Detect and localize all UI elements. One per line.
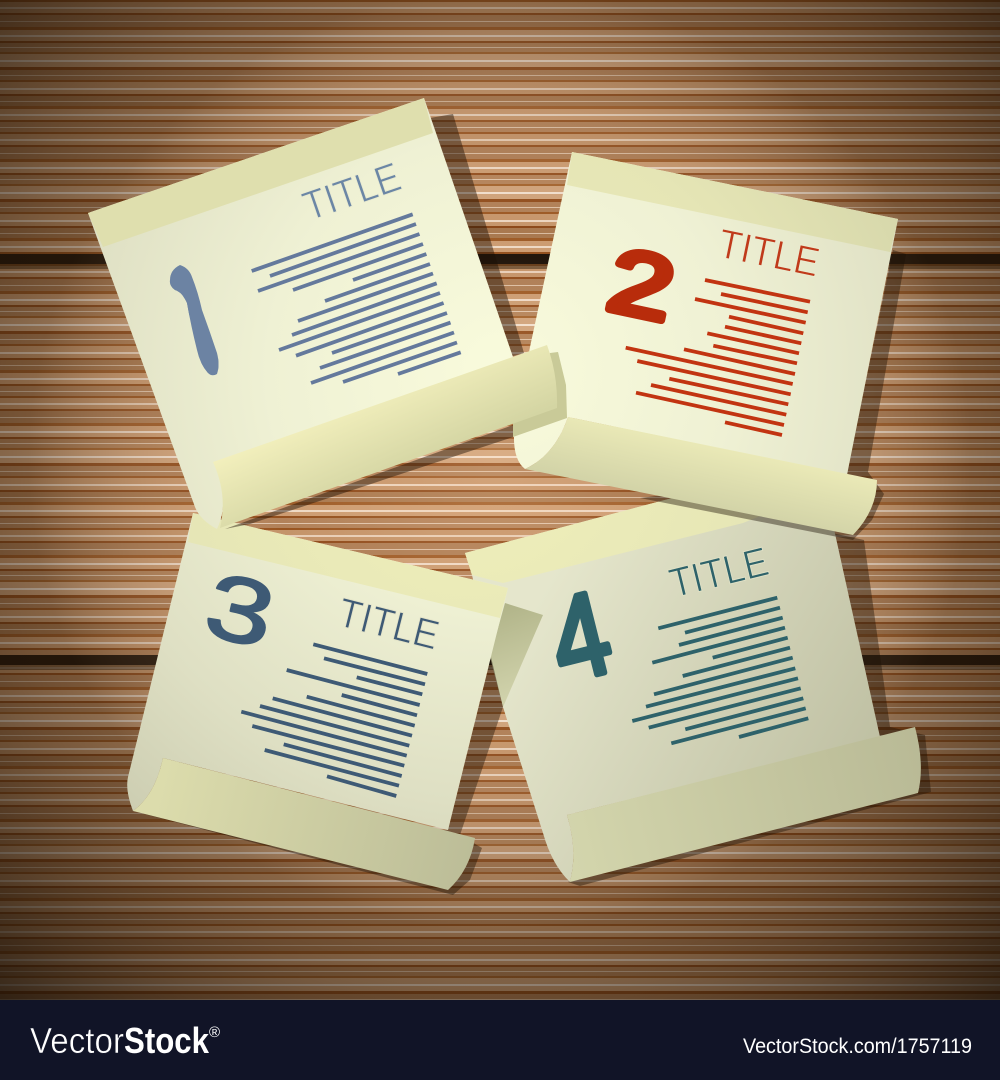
footer logo: Stock <box>124 1020 210 1061</box>
shadow: paper 3 <box>133 657 503 895</box>
paper 4 top band <box>465 496 770 583</box>
paper 2 title: TITLE <box>714 220 824 286</box>
footer logo: Vector <box>30 1020 124 1061</box>
paper 2 number: 2 <box>600 228 683 340</box>
paper 4 number: 4 <box>537 567 623 708</box>
paper 2 roll <box>525 417 877 535</box>
paper 4 fold <box>490 603 543 707</box>
paper 4 sheet <box>465 496 880 882</box>
paper 3 sheet <box>127 513 508 830</box>
paper 3 title: TITLE <box>334 589 444 659</box>
paper 4 <box>465 496 931 886</box>
paper 3 text lines <box>241 644 427 796</box>
paper 2 <box>514 152 906 540</box>
paper 1 sheet <box>88 98 513 529</box>
paper 3 number: 3 <box>196 552 284 668</box>
paper 4 roll <box>567 727 921 882</box>
paper 3 <box>127 513 508 895</box>
paper 1 number: 1 <box>140 237 251 411</box>
paper 4 text lines <box>632 598 808 743</box>
shadow: paper 4 <box>568 533 931 886</box>
paper 1 text lines <box>252 214 461 383</box>
paper 4 title: TITLE <box>665 538 773 606</box>
paper 1 roll <box>213 345 557 528</box>
paper 3 roll <box>133 758 475 890</box>
footer logo: ® <box>209 1024 220 1041</box>
paper 2 text lines <box>626 280 810 435</box>
footer logo <box>30 1020 220 1061</box>
paper 1 title: TITLE <box>297 153 406 230</box>
paper 1 roll back <box>513 352 567 437</box>
paper 1 top band <box>88 98 433 247</box>
shadow: paper 1 <box>225 114 524 529</box>
paper 2 top band <box>567 152 898 252</box>
footer url: VectorStock.com/1757119 <box>743 1035 972 1058</box>
shadow: paper 2 <box>640 250 906 540</box>
paper 1 <box>88 98 567 529</box>
paper 3 top band <box>188 513 508 618</box>
paper 2 sheet <box>514 152 898 475</box>
footer bar <box>0 1000 1000 1080</box>
